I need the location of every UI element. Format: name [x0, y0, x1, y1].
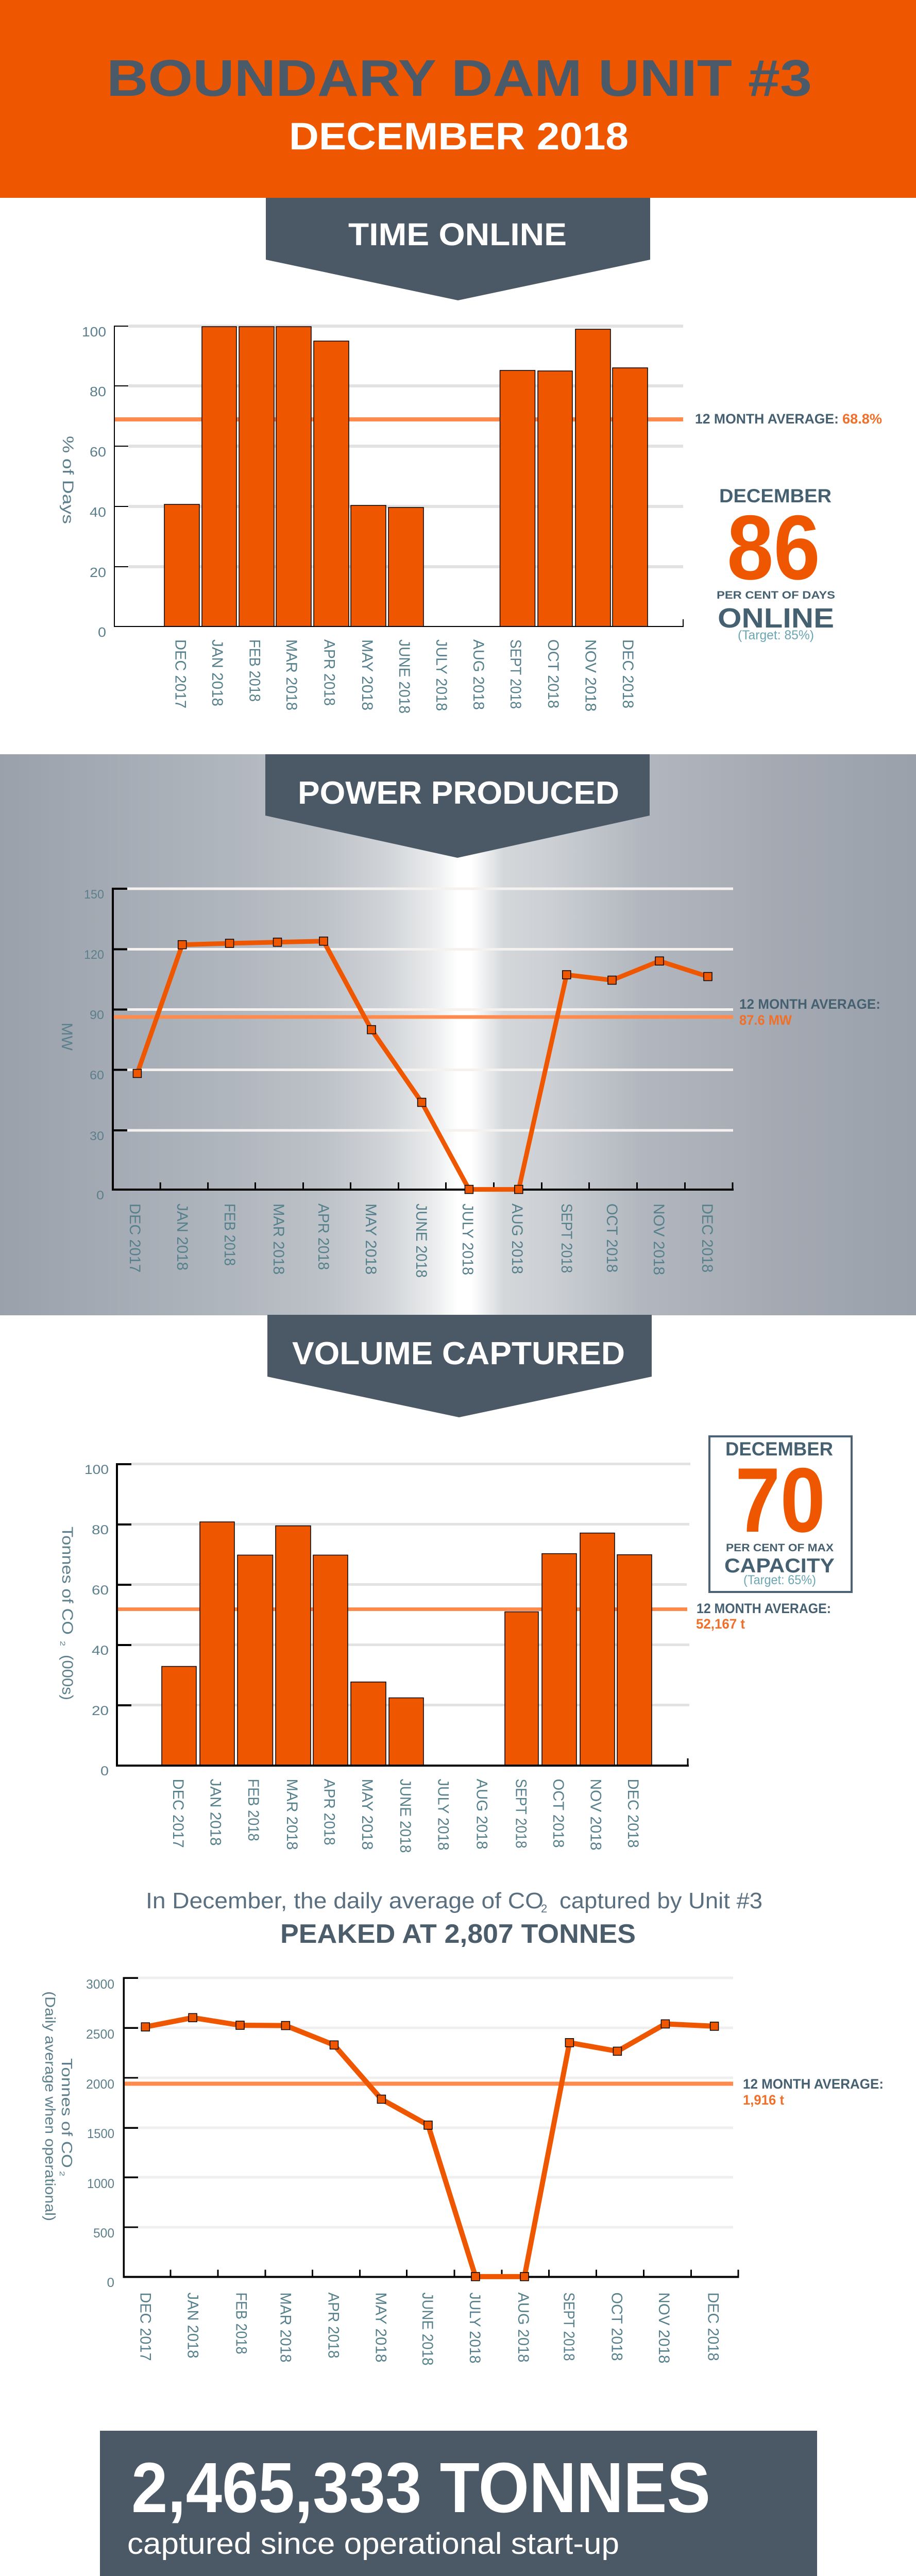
- x axis month labels: MAR 2018: [270, 1204, 287, 1275]
- average line: [117, 1607, 687, 1611]
- y axis title: 2: [58, 2171, 66, 2176]
- average line: [124, 2081, 733, 2086]
- total tonnes: 2,465,333 TONNES: [131, 2448, 710, 2528]
- x axis month labels: NOV 2018: [650, 1204, 667, 1275]
- axes: [116, 1463, 689, 1767]
- x axis month labels: SEPT 2018: [512, 1779, 530, 1849]
- x axis month labels: [137, 2293, 721, 2366]
- axes: [114, 326, 684, 627]
- x axis month labels: APR 2018: [315, 1204, 332, 1270]
- x axis month labels: SEPT 2018: [558, 1204, 575, 1273]
- x axis month labels: AUG 2018: [508, 1204, 525, 1274]
- x axis month labels: [126, 1204, 716, 1278]
- y axis labels: 40: [92, 1643, 109, 1658]
- x axis month labels: NOV 2018: [587, 1779, 604, 1851]
- callout: december 86 per cent online: ONLINE: [718, 603, 834, 634]
- gridlines: [131, 1463, 690, 1706]
- y axis labels: 3000: [86, 1977, 114, 1992]
- average label: power produced: 87.6 MW: [739, 1012, 792, 1028]
- x axis month labels: DEC 2017: [126, 1204, 143, 1273]
- x axis month labels: JULY 2018: [435, 1779, 452, 1851]
- y axis labels: [82, 324, 106, 640]
- callout: december 70 per cent of max capacity: DECEMBER: [725, 1438, 833, 1460]
- average line: [114, 1015, 733, 1019]
- bars: [162, 1522, 652, 1766]
- x axis month labels: NOV 2018: [655, 2293, 672, 2364]
- x axis month labels: DEC 2018: [705, 2293, 721, 2361]
- callout: december 70 per cent of max capacity: [709, 1436, 852, 1592]
- data markers: [141, 2013, 719, 2281]
- y axis labels: [86, 1977, 114, 2290]
- x axis month labels: FEB 2018: [246, 639, 263, 702]
- x axis month labels: NOV 2018: [582, 639, 599, 711]
- x axis month labels: DEC 2017: [137, 2293, 154, 2361]
- header band: [0, 0, 916, 198]
- x axis month labels: [172, 639, 636, 714]
- x axis month labels: JUNE 2018: [419, 2293, 436, 2366]
- x axis month labels: JULY 2018: [433, 639, 450, 711]
- x axis month labels: MAY 2018: [362, 1204, 379, 1275]
- y axis title: MW: [58, 1023, 75, 1051]
- y axis labels: 30: [90, 1129, 104, 1143]
- y axis labels: 100: [84, 1463, 109, 1477]
- y axis labels: 60: [90, 444, 106, 460]
- gridlines: [138, 1976, 733, 2229]
- y axis title: [42, 1991, 75, 2221]
- x axis month labels: FEB 2018: [221, 1204, 238, 1266]
- average label: volume captured: [696, 1601, 831, 1632]
- x axis month labels: AUG 2018: [515, 2293, 532, 2363]
- y axis labels: 0: [96, 1189, 104, 1202]
- y axis labels: 1000: [87, 2177, 114, 2191]
- x axis month labels: JULY 2018: [459, 1204, 476, 1275]
- x axis month labels: APR 2018: [321, 639, 338, 706]
- heading: daily average statement: In December, the daily average of CO: [146, 1888, 544, 1913]
- y axis labels: 80: [90, 384, 106, 399]
- callout: december 86 per cent online: PER CENT OF DAYS: [717, 589, 835, 601]
- bars: [164, 327, 648, 626]
- gridlines: [129, 325, 683, 568]
- subtitle: DECEMBER 2018: [289, 115, 629, 158]
- y axis labels: 40: [90, 504, 106, 520]
- callout: december 86 per cent online: 86: [727, 496, 820, 599]
- x axis month labels: [169, 1779, 641, 1853]
- heading: peak tonnes: PEAKED AT 2,807 TONNES: [280, 1919, 636, 1949]
- x axis month labels: MAY 2018: [372, 2293, 389, 2363]
- title: BOUNDARY DAM UNIT #3: [107, 49, 812, 107]
- average label: volume captured: 12 MONTH AVERAGE:: [697, 1601, 831, 1616]
- x axis month labels: DEC 2018: [699, 1204, 716, 1273]
- x axis month labels: JAN 2018: [174, 1204, 191, 1270]
- axes: [123, 1977, 739, 2278]
- x axis month labels: SEPT 2018: [560, 2293, 577, 2361]
- x axis month labels: APR 2018: [321, 1779, 338, 1845]
- x axis month labels: DEC 2017: [169, 1779, 186, 1848]
- y axis labels: 60: [92, 1583, 109, 1598]
- panel: power produced background: [0, 754, 916, 1315]
- line chart: power produced: [58, 887, 734, 1278]
- y axis labels: 60: [90, 1069, 104, 1082]
- y axis title: (000s): [59, 1655, 76, 1700]
- axes: [112, 888, 734, 1191]
- y axis labels: 2000: [86, 2077, 114, 2092]
- x axis month labels: JAN 2018: [209, 639, 226, 706]
- x axis month labels: APR 2018: [325, 2293, 342, 2359]
- section banner: time online: [266, 198, 650, 300]
- callout: december 70 per cent of max capacity: (Target: 65%): [743, 1573, 816, 1587]
- y axis title: % of Days: [59, 436, 76, 524]
- section banner: time online: TIME ONLINE: [348, 217, 567, 252]
- x axis month labels: MAR 2018: [277, 2293, 294, 2363]
- x axis month labels: MAR 2018: [283, 1779, 300, 1850]
- y axis labels: 0: [107, 2276, 114, 2290]
- x axis month labels: OCT 2018: [608, 2293, 625, 2361]
- y axis title: Tonnes of CO: [58, 2058, 75, 2168]
- y axis labels: 80: [92, 1523, 109, 1537]
- x axis month labels: DEC 2018: [624, 1779, 641, 1848]
- line chart: daily average CO2 captured: [42, 1976, 739, 2366]
- y axis labels: 0: [98, 624, 106, 640]
- x axis month labels: FEB 2018: [232, 2293, 249, 2354]
- y axis labels: 90: [90, 1008, 104, 1022]
- average label: power produced: 12 MONTH AVERAGE:: [739, 996, 880, 1012]
- y axis title: Tonnes of CO: [59, 1527, 76, 1635]
- average label: daily CO2: 12 MONTH AVERAGE:: [743, 2076, 884, 2092]
- x axis month labels: OCT 2018: [550, 1779, 567, 1848]
- average label: daily CO2: [743, 2076, 884, 2108]
- panel: total captured: [100, 2431, 817, 2576]
- callout: december 86 per cent online: [717, 485, 835, 642]
- data line: [137, 941, 708, 1190]
- x axis month labels: DEC 2017: [172, 639, 189, 708]
- x axis month labels: JAN 2018: [207, 1779, 224, 1846]
- y axis title: (Daily average when operational): [42, 1991, 58, 2221]
- bar chart: volume captured: [59, 1463, 690, 1853]
- captured since start-up: captured since operational start-up: [127, 2527, 619, 2561]
- y axis labels: 120: [84, 948, 104, 962]
- y axis labels: 20: [92, 1704, 109, 1718]
- callout: december 70 per cent of max capacity: 70: [735, 1449, 825, 1551]
- average label: power produced: [739, 996, 880, 1028]
- bar chart: time online: [59, 324, 684, 714]
- y axis labels: 20: [90, 565, 106, 580]
- x axis month labels: JULY 2018: [466, 2293, 483, 2364]
- gridlines: [127, 887, 733, 1131]
- callout: december 70 per cent of max capacity: PER CENT OF MAX: [726, 1542, 834, 1554]
- y axis labels: 1500: [87, 2127, 114, 2141]
- x axis month labels: JUNE 2018: [396, 639, 413, 714]
- x axis month labels: MAR 2018: [283, 639, 300, 710]
- x axis month labels: OCT 2018: [545, 639, 562, 708]
- average label: volume captured: 52,167 t: [696, 1616, 745, 1632]
- x axis month labels: AUG 2018: [473, 1779, 490, 1850]
- y axis labels: 100: [82, 324, 106, 340]
- x axis month labels: DEC 2018: [619, 639, 636, 708]
- section banner: power produced: POWER PRODUCED: [298, 775, 619, 811]
- x axis month labels: JUNE 2018: [413, 1204, 430, 1278]
- x axis month labels: JAN 2018: [184, 2293, 201, 2359]
- x axis month labels: AUG 2018: [470, 639, 487, 710]
- average line: [114, 417, 683, 421]
- y axis labels: 150: [84, 888, 104, 902]
- heading: daily average statement: [146, 1888, 762, 1949]
- section banner: volume captured: [267, 1315, 652, 1417]
- average label: daily CO2: 1,916 t: [743, 2092, 784, 2108]
- callout: december 70 per cent of max capacity: CAPACITY: [724, 1555, 835, 1577]
- y axis title: 2: [59, 1641, 67, 1646]
- x axis month labels: OCT 2018: [603, 1204, 620, 1273]
- y axis labels: [84, 1463, 109, 1778]
- section banner: volume captured: VOLUME CAPTURED: [292, 1336, 625, 1371]
- average label: time online: 68.8%: [842, 411, 882, 427]
- average label: time online: 12 MONTH AVERAGE:: [695, 411, 839, 427]
- y axis labels: [84, 888, 104, 1202]
- heading: daily average statement: 2: [541, 1902, 547, 1915]
- x axis month labels: JUNE 2018: [397, 1779, 414, 1853]
- data markers: [133, 937, 712, 1194]
- y axis labels: 500: [93, 2226, 114, 2241]
- data line: [145, 2018, 715, 2277]
- section banner: power produced: [265, 754, 650, 858]
- heading: daily average statement: captured by Unit #3: [559, 1888, 762, 1913]
- x axis month labels: MAY 2018: [359, 1779, 376, 1850]
- callout: december 86 per cent online: DECEMBER: [719, 485, 832, 506]
- x axis month labels: SEPT 2018: [507, 639, 524, 709]
- y axis labels: 2500: [86, 2027, 114, 2042]
- callout: december 86 per cent online: (Target: 85%): [738, 628, 814, 642]
- x axis month labels: MAY 2018: [359, 639, 376, 710]
- y axis labels: 0: [100, 1764, 109, 1778]
- y axis title: [59, 1527, 76, 1700]
- x axis month labels: FEB 2018: [245, 1779, 262, 1841]
